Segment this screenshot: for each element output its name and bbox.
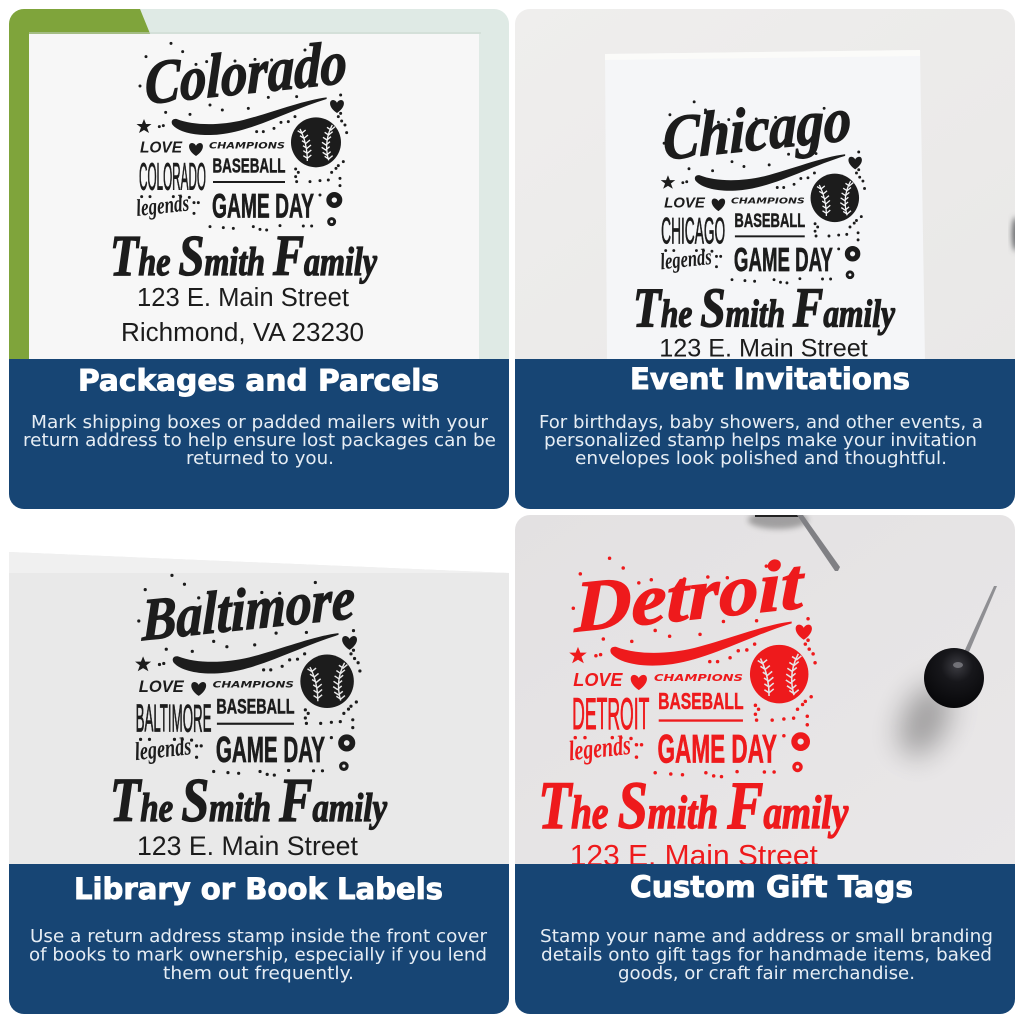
- panel: packages and parcels: [9, 9, 509, 509]
- photo: green fabric and card: [9, 9, 509, 361]
- description: return address to help ensure lost packages can be: [23, 430, 496, 451]
- description: personalized stamp helps make your invitation: [544, 430, 977, 451]
- icon: baseball: [750, 645, 808, 703]
- rule: [217, 723, 294, 725]
- icon: heart small: [189, 143, 203, 156]
- confetti dots: [664, 102, 865, 283]
- stamp city script: Colorado: [145, 29, 347, 118]
- icon: heart top: [796, 625, 812, 640]
- legends label: legends: [133, 731, 193, 766]
- swoosh: [172, 97, 327, 135]
- swoosh: [695, 154, 845, 191]
- family name: The Smith Family: [110, 223, 377, 288]
- confetti dots: [140, 43, 347, 230]
- baseball label: BASEBALL: [216, 694, 294, 718]
- heading: Packages and Parcels: [78, 364, 439, 398]
- rule: [659, 719, 743, 722]
- love label: LOVE: [140, 139, 183, 156]
- description: goods, or craft fair merchandise.: [618, 963, 915, 984]
- icon: star: [136, 119, 152, 133]
- caption band: [9, 359, 509, 509]
- family name: The Smith Family: [538, 768, 848, 843]
- game day label: GAME DAY: [216, 729, 325, 770]
- description: envelopes look polished and thoughtful.: [575, 448, 947, 469]
- photo: paper surface: [515, 515, 1015, 865]
- icon: heart small: [631, 675, 647, 690]
- stamp: Colorado: [110, 29, 377, 347]
- icon: heart top: [848, 157, 862, 169]
- confetti dots: [139, 575, 360, 775]
- champions label: CHAMPIONS: [654, 673, 743, 684]
- champions label: CHAMPIONS: [209, 141, 285, 151]
- description: them out frequently.: [163, 963, 354, 984]
- stamp: Detroit: [538, 542, 848, 873]
- heading: Custom Gift Tags: [630, 870, 913, 904]
- baseball label: BASEBALL: [734, 210, 805, 232]
- description: of books to mark ownership, especially if you lend: [29, 944, 487, 966]
- icon: rings: [847, 249, 858, 278]
- address line 2: Richmond, VA 23230: [121, 319, 364, 347]
- champions label: CHAMPIONS: [731, 196, 805, 206]
- baseball label: BASEBALL: [212, 155, 286, 177]
- heading: Library or Book Labels: [74, 872, 443, 906]
- description: returned to you.: [186, 448, 334, 469]
- rule: [735, 235, 805, 237]
- stamp: Colorado: COLORADO: [139, 156, 206, 198]
- address line 1: 123 E. Main Street: [137, 284, 349, 312]
- caption band: [9, 864, 509, 1014]
- stamp: Chicago: CHICAGO: [661, 210, 725, 251]
- description: Mark shipping boxes or padded mailers with your: [31, 412, 489, 433]
- icon: heart top: [342, 636, 357, 650]
- confetti dots: [573, 558, 815, 777]
- legends label: legends: [567, 730, 632, 767]
- game day label: GAME DAY: [212, 188, 314, 226]
- swoosh: [173, 633, 339, 674]
- description: Stamp your name and address or small branding: [540, 926, 993, 947]
- stamp: Chicago: [633, 84, 896, 363]
- pin lower: [889, 586, 997, 764]
- pin upper: [748, 511, 840, 571]
- icon: heart top: [330, 100, 344, 113]
- icon: baseball: [291, 117, 341, 167]
- panel: event invitations: [515, 9, 1020, 509]
- icon: rings: [341, 737, 352, 769]
- panel: custom gift tags: [515, 511, 1015, 1014]
- rule: [213, 181, 285, 183]
- champions label: CHAMPIONS: [213, 681, 295, 691]
- panel: library or book labels: [9, 515, 509, 1014]
- family name: The Smith Family: [633, 278, 896, 340]
- legends label: legends: [135, 191, 190, 222]
- icon: heart small: [712, 199, 725, 211]
- icon: baseball: [811, 174, 859, 222]
- photo: book page: [9, 515, 509, 866]
- stamp city script: Baltimore: [141, 564, 355, 653]
- stamp: Baltimore: [110, 564, 388, 861]
- family name: The Smith Family: [110, 767, 388, 835]
- icon: rings: [794, 735, 807, 770]
- stamp: Detroit: DETROIT: [572, 690, 649, 739]
- photo: wall and envelope: [515, 9, 1020, 361]
- description: For birthdays, baby showers, and other events, a: [539, 412, 983, 433]
- icon: star: [661, 175, 675, 189]
- love label: LOVE: [664, 195, 706, 212]
- icon: rings: [329, 195, 340, 225]
- stamp: Baltimore: BALTIMORE: [136, 698, 212, 741]
- game day label: GAME DAY: [658, 727, 777, 771]
- address line 1: 123 E. Main Street: [137, 830, 358, 861]
- stamp city script: Detroit: [573, 542, 806, 648]
- address line 1: 123 E. Main Street: [570, 840, 819, 873]
- description: details onto gift tags for handmade items, baked: [541, 944, 992, 966]
- icon: baseball: [300, 655, 354, 708]
- legends label: legends: [659, 244, 713, 275]
- swoosh: [610, 621, 792, 666]
- address line 1: 123 E. Main Street: [659, 336, 868, 363]
- love label: LOVE: [573, 670, 623, 690]
- stamp city script: Chicago: [663, 84, 851, 174]
- caption band: [515, 359, 1015, 509]
- baseball label: BASEBALL: [658, 688, 744, 714]
- icon: heart small: [191, 682, 206, 696]
- heading: Event Invitations: [630, 362, 910, 396]
- icon: star: [569, 647, 587, 663]
- icon: star: [135, 656, 151, 671]
- caption band: [515, 864, 1015, 1014]
- game day label: GAME DAY: [734, 241, 833, 278]
- love label: LOVE: [139, 677, 185, 696]
- description: Use a return address stamp inside the front cover: [30, 926, 488, 947]
